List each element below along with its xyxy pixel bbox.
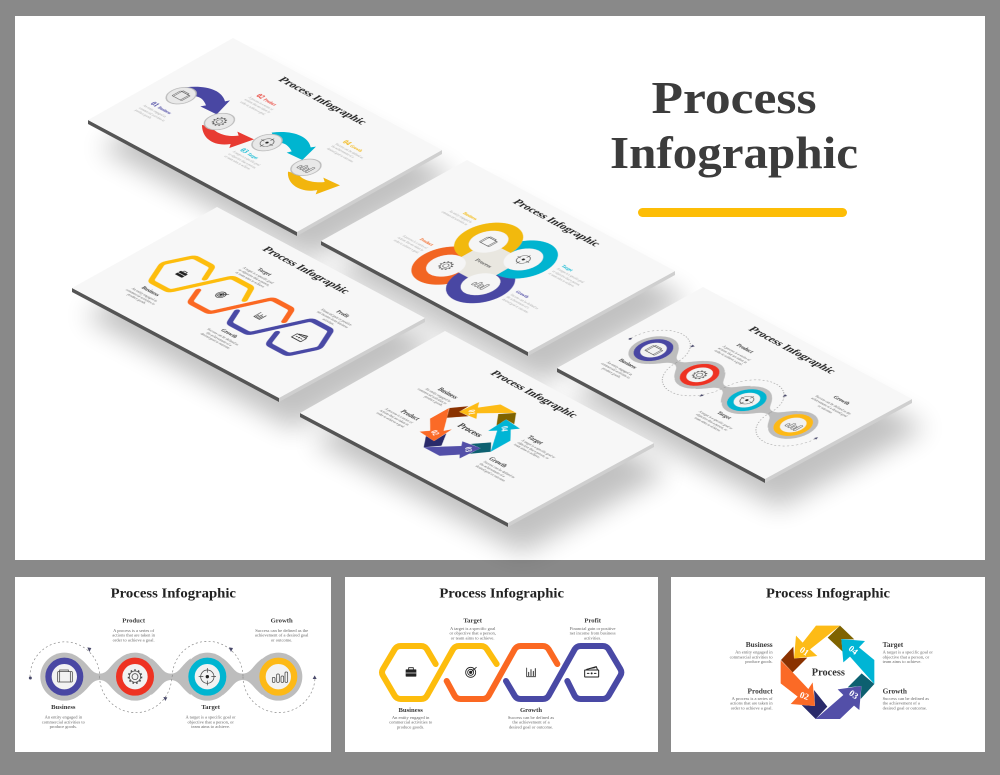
bottom panel: arrow cycle: [671, 577, 985, 752]
bottom panel: bead timeline: Growth: [271, 617, 293, 624]
main title: [610, 72, 858, 178]
ring diagram and labels: or team aims to achieve.: [547, 272, 576, 288]
bead timeline diagram and labels: Target: [715, 411, 733, 421]
bottom panel: arrow cycle: Target: [883, 640, 904, 649]
bottom panel: arrow cycle: Growth: [883, 686, 907, 695]
bottom panel: bead timeline: or outcome.: [271, 637, 292, 642]
bottom panel: arrow cycle: objective that a person, or: [883, 654, 930, 660]
hexagon diagram and labels: An entity engaged in: [130, 287, 159, 302]
slide content: step circles and labels: 02Product: [254, 92, 281, 107]
bottom panel: arrow cycle: 01: [798, 645, 811, 658]
arrow cycle diagram and labels: Success can be defined as: [482, 460, 517, 479]
hexagon diagram and labels: [116, 225, 388, 374]
hexagon diagram and labels: desired goal or outcome.: [199, 332, 232, 350]
arrow cycle diagram and labels: Process Infographic: [487, 369, 581, 420]
ring diagram and labels: commercial activities to: [440, 210, 469, 226]
arrow cycle diagram and labels: the achievement of a: [478, 463, 507, 478]
isometric slide: arrow cycle: [300, 331, 668, 553]
arrow cycle diagram and labels: 04: [499, 426, 510, 432]
bottom panel: bead timeline: A process is a series of: [113, 628, 155, 633]
bead timeline diagram and labels: Success can be defined as the: [814, 395, 852, 416]
bottom panel: hexagon chain: net income from business: [570, 631, 616, 636]
arrow cycle diagram and labels: desired goal or outcome.: [474, 465, 507, 482]
slide content: step circles and labels: desired goal or outcome.: [326, 147, 355, 163]
bottom panel: hexagon chain: Profit: [584, 618, 602, 625]
hexagon diagram and labels: Success can be defined as: [206, 328, 240, 346]
arrow cycle diagram and labels: actions that are taken in: [379, 409, 410, 426]
arrow cycle diagram and labels: [367, 357, 608, 489]
bottom panel: arrow cycle: Success can be defined as: [883, 696, 929, 701]
ring diagram and labels: Success can be defined as: [509, 293, 540, 310]
bead timeline diagram and labels: objective that a person, or: [694, 413, 729, 432]
hexagon diagram and labels: the achievement of a: [205, 331, 233, 347]
ring diagram and labels: or objective that a person,: [550, 270, 582, 287]
slide content: step circles and labels: 04Growth: [340, 139, 367, 153]
slide content: step circles and labels: or team aims to achieve.: [223, 155, 252, 171]
bottom panel: hexagon chain: or objective that a person,: [449, 631, 496, 637]
hexagon diagram and labels: Profit: [334, 310, 351, 319]
arrow cycle diagram and labels: produce goods.: [423, 395, 444, 407]
bead timeline diagram and labels: team aims to achieve.: [693, 417, 723, 432]
bottom panel: hexagon chain: Business: [398, 707, 423, 714]
bottom panel: arrow cycle: team aims to achieve.: [883, 659, 922, 664]
slide content: step circles and labels: 01Business: [148, 100, 176, 116]
bottom panel: arrow cycle: 04: [847, 643, 860, 657]
main title: Process: [652, 72, 816, 123]
bead timeline diagram and labels: achievement of a desired goal: [810, 397, 849, 418]
bottom panel: bead timeline: objective that a person, or: [187, 719, 234, 725]
bottom panel: hexagon chain: or team aims to achieve.: [451, 635, 495, 640]
bead timeline diagram and labels: or outcome.: [816, 405, 834, 414]
arrow cycle diagram and labels: 03: [463, 446, 474, 453]
slide content: step circles and labels: produce goods.: [133, 109, 153, 120]
bottom panel: bead timeline: An entity engaged in: [45, 715, 83, 720]
isometric slide: hexagon chain: [72, 207, 439, 429]
bead timeline diagram and labels: produce goods.: [601, 367, 623, 379]
ring diagram and labels: Target: [560, 264, 575, 272]
bottom panel: bead timeline: produce goods.: [50, 724, 77, 729]
arrow cycle diagram and labels: Growth: [487, 456, 510, 469]
slide content: step circles and labels: order to achieve a goal.: [239, 101, 267, 116]
bottom panel: bead timeline: Process Infographic: [111, 586, 236, 601]
ring diagram and labels: Product: [418, 237, 435, 247]
title underline bar: [638, 208, 847, 217]
ring diagram and labels: Growth: [514, 290, 531, 299]
bottom panel: hexagon chain: Financial gain or positive: [570, 626, 616, 631]
ring diagram and labels: actions that are taken in: [396, 236, 425, 252]
slide content: step circles and labels: A target is a specific goal: [231, 150, 261, 167]
arrow cycle diagram and labels: objective that a person, or: [515, 441, 551, 460]
bead timeline diagram and labels: A target is a specific goal or: [697, 410, 734, 430]
bottom panel: arrow cycle: actions that are taken in: [730, 701, 773, 706]
bottom panel: arrow cycle: Process: [812, 668, 845, 679]
bottom panel: bead timeline: commercial activities to: [42, 719, 86, 724]
hexagon diagram and labels: Business: [139, 286, 162, 298]
bottom panel: arrow cycle: Product: [748, 686, 773, 695]
isometric slide: curved arrows: [88, 38, 456, 260]
hexagon diagram and labels: or team aims to achieve.: [234, 271, 266, 289]
bottom panel: arrow cycle: An entity engaged in: [735, 650, 773, 655]
hexagon diagram and labels: Target: [255, 267, 273, 277]
hexagon diagram and labels: commercial activities to: [125, 288, 157, 306]
bottom panel: arrow cycle: Business: [746, 640, 773, 649]
bead timeline diagram and labels: Process Infographic: [745, 325, 839, 376]
ring diagram and labels: [368, 183, 631, 327]
bead timeline diagram and labels: order to achieve a goal.: [713, 349, 744, 366]
ring diagram and labels: Process Infographic: [510, 198, 603, 248]
bead timeline diagram and labels: actions that are taken in: [717, 347, 748, 364]
arrow cycle diagram and labels: Business: [435, 387, 460, 400]
slide content: step circles and labels: the achievement of a: [330, 145, 356, 159]
bottom panel: hexagon chain: produce goods.: [397, 724, 424, 729]
bottom panel: arrow cycle: order to achieve a goal.: [731, 705, 773, 710]
ring diagram and labels: A target is a specific goal: [555, 268, 585, 284]
bottom panel: bead timeline: Product: [122, 617, 146, 624]
bottom panel: arrow cycle: produce goods.: [745, 659, 773, 664]
hexagon diagram and labels: A target is a specific goal: [241, 266, 275, 285]
bottom panel: hexagon chain: activities.: [584, 635, 601, 640]
bottom panel: hexagon chain: [345, 577, 658, 752]
hexagon diagram and labels: net income from business: [315, 311, 350, 329]
hexagon diagram and labels: Process Infographic: [259, 245, 353, 296]
hexagon diagram and labels: Growth: [219, 328, 239, 339]
ring diagram and labels: the achievement of a: [505, 296, 531, 310]
ring diagram and labels: Process: [473, 258, 494, 269]
bottom panel: arrow cycle: desired goal or outcome.: [883, 705, 927, 710]
slide content: step circles and labels: A process is a series of: [247, 96, 275, 111]
bottom panel: bead timeline: A target is a specific goal or: [186, 715, 236, 720]
hexagon diagram and labels: produce goods.: [126, 293, 148, 305]
hexagon diagram and labels: or objective that a person,: [236, 268, 271, 287]
ring diagram and labels: Business: [462, 211, 479, 221]
bead timeline diagram and labels: commercial activities to: [600, 362, 632, 379]
bottom panel: bead timeline: Target: [201, 704, 221, 711]
arrow cycle diagram and labels: Process: [455, 422, 486, 439]
bottom panel: bead timeline: actions that are taken in: [112, 633, 156, 638]
bottom panel: hexagon chain: the achievement of a: [512, 720, 550, 725]
bottom panel: hexagon chain: Process Infographic: [439, 586, 564, 601]
isometric slide: four overlapping rings: [321, 160, 689, 383]
arrow cycle diagram and labels: A target is a specific goal or: [520, 439, 557, 459]
bottom panel: arrow cycle: A target is a specific goal or: [883, 650, 933, 655]
bottom panel: hexagon chain: Target: [463, 618, 483, 625]
bottom panel: hexagon chain: A target is a specific goal: [450, 626, 496, 631]
arrow cycle diagram and labels: Target: [525, 435, 545, 446]
bottom panel: arrow cycle: commercial activities to: [730, 654, 773, 659]
bottom panel: bead timeline: achievement of a desired goal: [255, 633, 309, 638]
curved arrow graphics: [185, 87, 340, 194]
arrow cycle diagram and labels: commercial activities to: [416, 388, 448, 405]
main title: Infographic: [610, 127, 858, 178]
arrow cycle diagram and labels: 01: [466, 409, 478, 416]
arrow cycle diagram and labels: 02: [428, 429, 442, 437]
slide content: step circles and labels: Process Infographic: [275, 76, 370, 127]
arrow cycle diagram and labels: order to achieve a goal.: [375, 411, 406, 428]
bottom panel: arrow cycle: 02: [798, 690, 811, 702]
arrow cycle diagram and labels: An entity engaged in: [424, 387, 452, 403]
slide content: step circles and labels: An entity engaged in: [142, 104, 168, 118]
bead timeline diagram and labels: A process is a series of: [721, 345, 752, 362]
bottom panel: bead timeline: [15, 577, 331, 752]
slide content: step circles and labels: [133, 51, 401, 197]
ring diagram and labels: An entity engaged in: [447, 210, 473, 224]
bottom panel: bead timeline: order to achieve a goal.: [113, 637, 155, 642]
slide content: step circles and labels: Success can be defined as: [334, 143, 365, 159]
bead timeline diagram and labels: Product: [734, 343, 755, 355]
bottom panel: hexagon chain: Success can be defined as: [508, 715, 554, 720]
bottom panel: arrow cycle: A process is a series of: [732, 696, 773, 701]
bottom panel: bead timeline: team aims to achieve.: [191, 724, 230, 729]
bead timeline diagram and labels: Growth: [831, 395, 852, 406]
ring diagram and labels: desired goal or outcome.: [501, 298, 531, 314]
bead timeline diagram and labels: [587, 297, 891, 463]
bottom panel: arrow cycle: Process Infographic: [766, 586, 890, 601]
bottom panel: hexagon chain: An entity engaged in: [392, 715, 430, 720]
slide content: step circles and labels: actions that are taken in: [243, 98, 272, 114]
bottom panel: bead timeline: Success can be defined as the: [255, 628, 308, 633]
bottom panel: bead timeline: Business: [51, 704, 76, 711]
bottom panel: hexagon chain: commercial activities to: [389, 720, 433, 725]
top panel: [15, 16, 985, 560]
bead timeline diagram and labels: Business: [616, 358, 639, 370]
bottom panel: hexagon chain: desired goal or outcome.: [509, 724, 553, 729]
slide content: step circles and labels: or objective that a person,: [226, 153, 258, 170]
isometric slide: bead timeline: [557, 287, 926, 508]
bottom panel: arrow cycle: the achievement of a: [883, 701, 920, 706]
hexagon diagram and labels: activities.: [321, 318, 336, 326]
slide content: step circles and labels: commercial activities to: [138, 107, 167, 122]
bead timeline diagram and labels: An entity engaged in: [605, 361, 634, 376]
arrow cycle diagram and labels: A process is a series of: [383, 408, 415, 424]
hexagon diagram and labels: Financial gain or positive: [319, 308, 353, 327]
ring diagram and labels: order to achieve a goal.: [392, 239, 421, 254]
slide content: step circles and labels: 03Target: [238, 147, 263, 161]
bottom panel: arrow cycle: 03: [847, 688, 861, 702]
arrow cycle diagram and labels: team aims to achieve.: [512, 443, 542, 459]
bottom panel: hexagon chain: Growth: [520, 707, 542, 714]
arrow cycle diagram and labels: Product: [398, 409, 422, 422]
ring diagram and labels: A process is a series of: [401, 235, 430, 250]
